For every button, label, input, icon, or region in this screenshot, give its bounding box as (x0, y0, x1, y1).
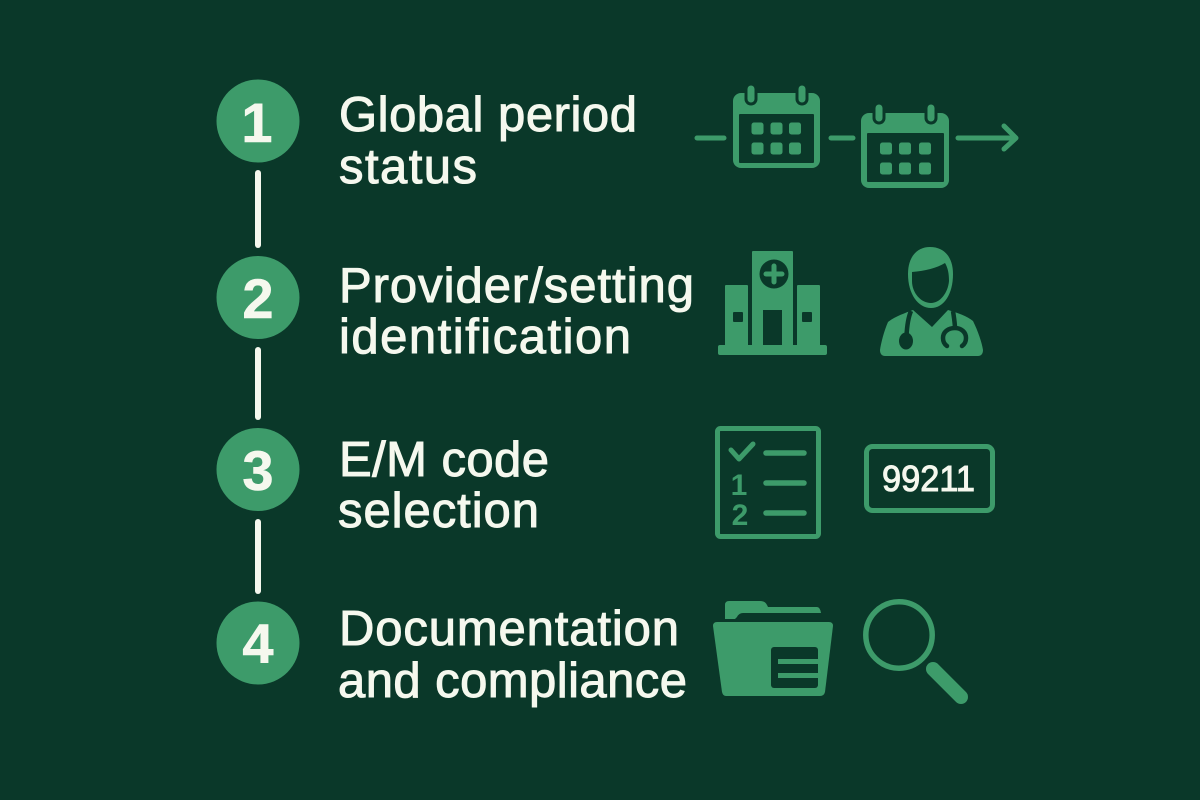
icon: doctor with stethoscope (880, 247, 983, 356)
icon: calendars on a timeline arrow (697, 84, 1016, 188)
heading: E/M code selection: selection (338, 484, 539, 538)
icon: checklist: 2 (732, 499, 748, 532)
icon: checklist: 1 (731, 469, 747, 502)
heading: provider/setting identification: identification (339, 310, 631, 364)
icon: magnifying glass (866, 602, 961, 697)
step 1 number badge: 1 (241, 91, 273, 154)
step 3 number badge (216, 428, 300, 511)
heading: global period status (339, 88, 637, 194)
heading: documentation and compliance: Documentation (339, 602, 679, 656)
heading: E/M code selection: E/M code (339, 433, 549, 487)
icon: code box 99211 (866, 446, 992, 510)
heading: global period status: status (339, 140, 477, 194)
heading: documentation and compliance (338, 602, 687, 708)
step 2 number badge (216, 256, 300, 339)
heading: global period status: Global period (339, 88, 637, 142)
icon: folder with document (713, 601, 833, 696)
step 1 number badge (216, 80, 300, 162)
connector line 2 to 3 (255, 347, 261, 420)
icon: code box 99211: 99211 (882, 458, 975, 499)
heading: provider/setting identification: Provider/setting (339, 259, 694, 313)
icon: second calendar (861, 103, 949, 188)
icon: first calendar (733, 84, 820, 168)
heading: documentation and compliance: and compliance (338, 654, 687, 708)
icon: hospital (718, 251, 827, 355)
step 4 number badge (216, 602, 300, 684)
step 2 number badge: 2 (242, 267, 274, 330)
heading: provider/setting identification (339, 259, 694, 364)
heading: E/M code selection (338, 433, 549, 538)
step 4 number badge: 4 (242, 612, 274, 675)
connector line 1 to 2 (255, 170, 261, 248)
connector line 3 to 4 (255, 519, 261, 594)
icon: checklist (718, 428, 818, 536)
step 3 number badge: 3 (242, 439, 274, 502)
